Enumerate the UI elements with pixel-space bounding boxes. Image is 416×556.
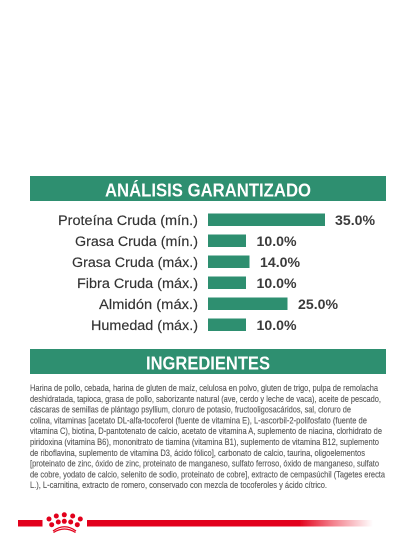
panel: guaranteed analysis (30, 176, 386, 333)
row: fibra cruda: Fibra Cruda (máx.) (77, 276, 198, 291)
row: grasa cruda máxima: Grasa Cruda (máx.) (72, 255, 198, 270)
heading: ingredientes: INGREDIENTES (146, 353, 270, 373)
text block: ingredient list: L.), L-carnitina, extracto de romero, conservado con mezcla de tocoferoles y ácido cítrico. (30, 480, 327, 491)
row: almidón (99, 297, 338, 312)
footer: royal canin band (18, 512, 373, 532)
row: proteína cruda (58, 213, 375, 228)
red band left (18, 520, 42, 526)
row: grasa cruda mínima: 10.0% (256, 234, 296, 249)
row: fibra cruda: 10.0% (256, 276, 296, 291)
heading: ingredientes (30, 349, 386, 374)
row: proteína cruda: Proteína Cruda (mín.) (58, 213, 198, 228)
row: grasa cruda mínima (75, 234, 296, 249)
row: humedad (91, 318, 296, 333)
heading: análisis garantizado: ANÁLISIS GARANTIZADO (105, 179, 311, 200)
row: grasa cruda máxima (72, 255, 300, 270)
row: humedad: 10.0% (256, 318, 296, 333)
text block: ingredient list (30, 383, 386, 491)
icon: crown (46, 512, 83, 532)
row: fibra cruda (77, 276, 296, 291)
row: proteína cruda: 35.0% (335, 213, 375, 228)
heading: análisis garantizado (30, 176, 386, 201)
row: humedad: Humedad (máx.) (91, 318, 198, 333)
panel: ingredients (30, 349, 386, 491)
red band right with fade (87, 520, 373, 526)
row: almidón: 25.0% (298, 297, 338, 312)
row: grasa cruda mínima: Grasa Cruda (mín.) (75, 234, 198, 249)
row: grasa cruda máxima: 14.0% (260, 255, 300, 270)
row: almidón: Almidón (máx.) (99, 297, 198, 312)
